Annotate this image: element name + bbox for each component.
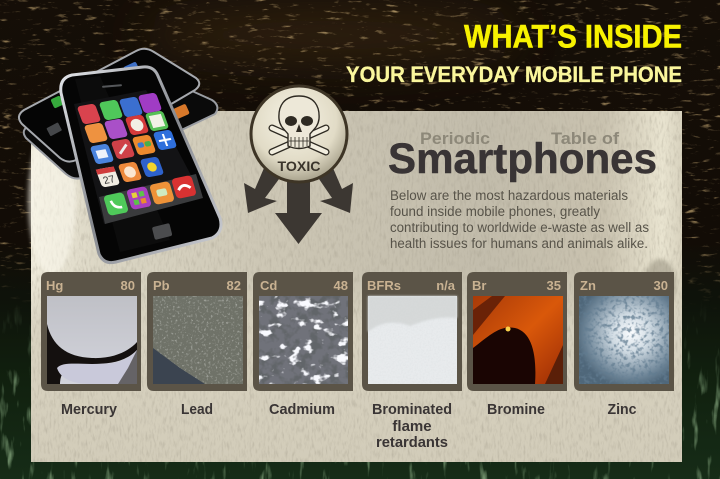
card: mercury <box>41 272 141 391</box>
icon: toxic skull badge <box>250 84 348 184</box>
card: brominated flame retardants: n/a <box>436 278 456 293</box>
speaker <box>102 84 122 88</box>
arrow: left <box>244 168 279 213</box>
heading: periodic table of smartphones: Smartphones <box>388 135 657 183</box>
label: toxic: TOXIC <box>278 158 320 174</box>
label: brominated flame retardants: flame <box>392 418 432 435</box>
card: cadmium: Cd <box>260 278 277 293</box>
icon: stacked smartphones <box>19 49 221 263</box>
card: zinc: 30 <box>654 278 668 293</box>
dock <box>99 174 203 224</box>
text block: description: found inside mobile phones, greatly <box>390 204 600 219</box>
heading: what's inside: WHAT’S INSIDE <box>464 18 682 54</box>
label: zinc: Zinc <box>608 401 636 418</box>
skull <box>279 96 319 148</box>
arrow: down <box>275 178 322 244</box>
card: lead: 82 <box>227 278 241 293</box>
crossbones <box>272 128 326 152</box>
card: cadmium: 48 <box>334 278 348 293</box>
card: brominated flame retardants <box>362 272 462 391</box>
heading: your everyday mobile phone: YOUR EVERYDAY MOBILE PHONE <box>346 62 682 87</box>
home button <box>152 223 172 240</box>
app icons <box>77 103 101 125</box>
card: bromine: 35 <box>547 278 561 293</box>
label: brominated flame retardants: Brominated <box>372 401 452 418</box>
label: mercury: Mercury <box>61 401 118 418</box>
arrow: right <box>319 168 353 213</box>
card: zinc <box>574 272 674 391</box>
label: brominated flame retardants: retardants <box>376 434 448 451</box>
front phone: 27 <box>102 174 117 187</box>
heading: periodic table of smartphones: Periodic <box>420 129 490 148</box>
back phone lower <box>24 72 217 179</box>
card: cadmium <box>253 272 353 391</box>
text block: description: contributing to worldwide e-waste as well as <box>390 220 649 235</box>
label: lead: Lead <box>181 401 213 418</box>
icon: toxic arrows <box>244 168 353 244</box>
panel: beige paper <box>28 111 682 462</box>
screen <box>74 90 203 224</box>
heading: periodic table of smartphones: Table of <box>551 129 619 148</box>
card: bromine <box>467 272 567 391</box>
front phone <box>61 67 221 263</box>
text block: description: Below are the most hazardous materials <box>390 188 628 203</box>
card: mercury: Hg <box>46 278 63 293</box>
text block: description <box>390 188 649 251</box>
label: bromine: Bromine <box>487 401 545 418</box>
label: cadmium: Cadmium <box>269 401 335 418</box>
card: lead: Pb <box>153 278 170 293</box>
card: brominated flame retardants: BFRs <box>367 278 401 293</box>
card: zinc: Zn <box>580 278 596 293</box>
title <box>346 18 682 87</box>
back phone upper <box>19 49 199 162</box>
card: mercury: 80 <box>121 278 135 293</box>
card: bromine: Br <box>472 278 486 293</box>
card: lead <box>147 272 247 391</box>
label: brominated flame retardants <box>372 401 452 451</box>
text block: description: health issues for humans and animals alike. <box>390 236 648 251</box>
